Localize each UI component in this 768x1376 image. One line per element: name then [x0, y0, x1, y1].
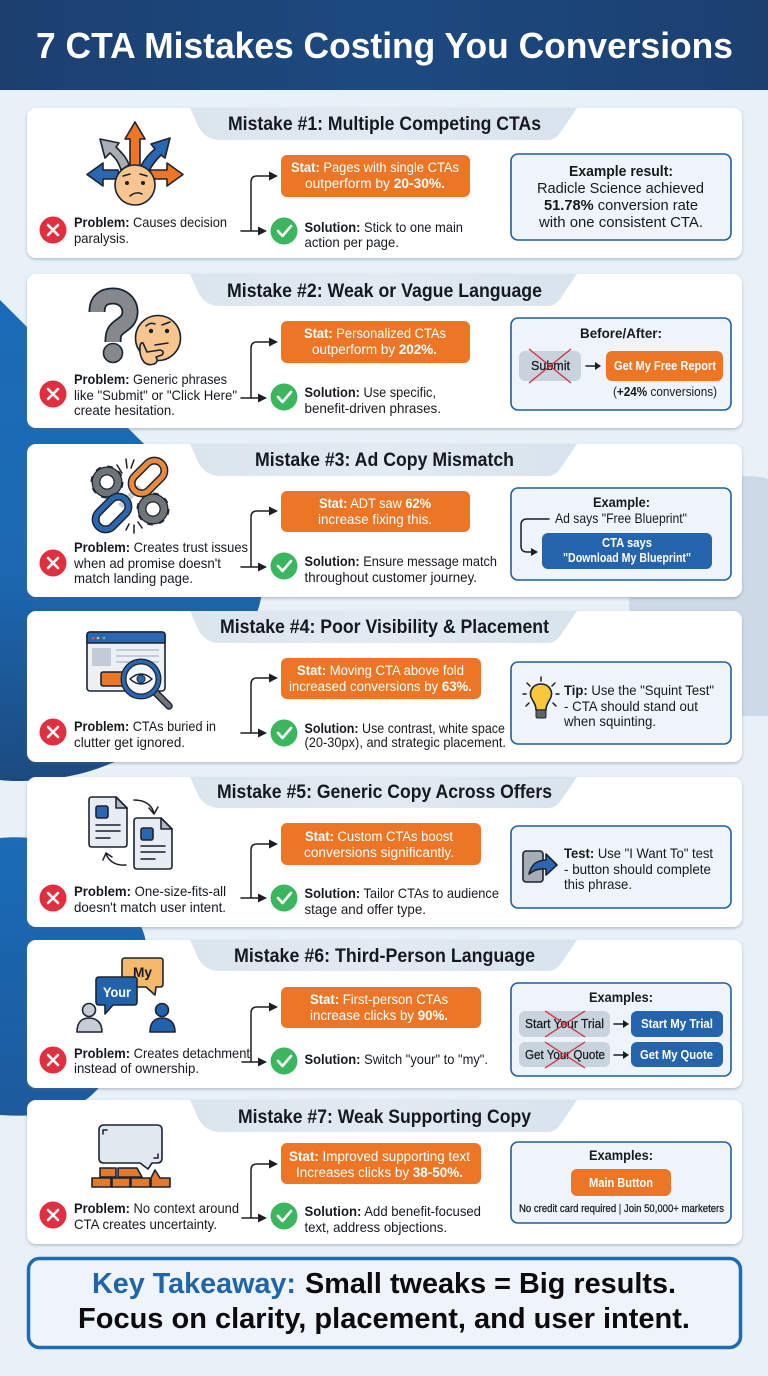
stat [281, 658, 481, 699]
stat: Stat: Personalized CTAs [304, 326, 446, 341]
test box [511, 826, 731, 908]
test box: Test: Use "I Want To" test [564, 845, 713, 861]
problem text: Problem: No context around [74, 1200, 239, 1216]
problem text: Problem: Creates detachment [74, 1045, 250, 1061]
problem text: Problem: Generic phrases [74, 371, 227, 387]
key takeaway [28, 1258, 740, 1348]
icon: swapped documents [89, 797, 172, 869]
stat [281, 155, 470, 197]
blue CTA button: CTA says [602, 536, 652, 550]
solution icon [270, 384, 298, 410]
solution text: (20-30px), and strategic placement. [304, 734, 506, 750]
main button [571, 1169, 671, 1196]
stat: Stat: ADT saw 62% [319, 496, 431, 511]
problem text: CTA creates uncertainty. [74, 1216, 217, 1232]
problem text: Problem: Causes decision [74, 214, 227, 230]
problem text [74, 214, 227, 246]
example box: Example result: [569, 163, 673, 180]
icon: broken chain and gears [91, 456, 169, 534]
before/after box [511, 318, 731, 410]
stat: Stat: Custom CTAs boost [305, 829, 453, 844]
solution text [304, 219, 463, 250]
solution text [304, 384, 441, 416]
stat: increase fixing this. [318, 512, 432, 527]
stat: conversions significantly. [304, 845, 454, 860]
example box: Ad says "Free Blueprint" [555, 510, 687, 526]
stat: Stat: Pages with single CTAs [291, 160, 459, 175]
problem text [74, 1200, 239, 1232]
problem text: paralysis. [74, 230, 129, 246]
example box: with one consistent CTA. [538, 214, 703, 231]
problem icon [40, 884, 66, 912]
problem text [74, 371, 237, 418]
example row 2 [519, 1042, 723, 1068]
arrow: problem to stat and solution [241, 172, 278, 236]
arrow: problem to stat and solution [241, 506, 278, 572]
example row 2: Get My Quote [640, 1048, 713, 1062]
title banner [0, 0, 768, 90]
stat [281, 823, 481, 865]
problem icon [40, 1202, 66, 1228]
stat: Stat: Moving CTA above fold [297, 663, 464, 678]
tip box: - CTA should stand out [564, 698, 698, 714]
solution text: Solution: Switch "your" to "my". [304, 1051, 488, 1067]
solution text: Solution: Add benefit-focused [304, 1203, 481, 1219]
tip box: Tip: Use the "Squint Test" [564, 682, 714, 698]
heading: mistake 4: Mistake #4: Poor Visibility & Placement [220, 617, 550, 638]
blue CTA button [542, 533, 712, 569]
stat: outperform by 20-30%. [305, 176, 445, 191]
panel: mistake 1 [27, 108, 742, 258]
solution text [304, 720, 506, 750]
main button: Main Button [589, 1176, 653, 1190]
problem text: match landing page. [74, 570, 193, 586]
problem text: Problem: One-size-fits-all [74, 883, 226, 899]
problem text: when ad promise doesn't [73, 555, 221, 571]
stat: outperform by 202%. [312, 342, 437, 357]
solution text: Solution: Tailor CTAs to audience [304, 885, 499, 901]
solution icon [270, 1202, 298, 1230]
heading: mistake 5: Mistake #5: Generic Copy Across Offers [217, 782, 552, 803]
title banner: 7 CTA Mistakes Costing You Conversions [36, 25, 733, 66]
stat: Increases clicks by 38-50%. [296, 1165, 463, 1180]
arrow [586, 362, 601, 370]
problem text: doesn't match user intent. [74, 899, 226, 915]
solution text: stage and offer type. [304, 901, 426, 917]
problem text [73, 539, 248, 586]
key takeaway: Key Takeaway: [92, 1268, 296, 1300]
before/after box: (+24% conversions) [613, 385, 717, 399]
tip box: when squinting. [563, 713, 656, 729]
stat: increased conversions by 63%. [289, 679, 472, 694]
problem icon [40, 380, 66, 408]
icon: share arrow on page [523, 851, 557, 882]
solution icon [270, 1048, 298, 1074]
icon: question mark and thinking face [97, 296, 180, 365]
blue CTA button: "Download My Blueprint" [563, 551, 691, 565]
arrow: problem to stat and solution [241, 840, 278, 902]
icon: speech bubbles and people: Your [103, 984, 131, 1000]
stat: Stat: Improved supporting text [289, 1149, 470, 1164]
solution text: throughout customer journey. [304, 569, 477, 585]
example box: Example: [593, 494, 650, 510]
problem icon [40, 1046, 66, 1074]
panel: mistake 5 [27, 777, 742, 927]
panel: mistake 7 [27, 1100, 742, 1244]
arrow: problem to stat and solution [241, 338, 278, 402]
stat [281, 987, 481, 1028]
example box: 51.78% conversion rate [544, 197, 698, 214]
solution icon [270, 720, 298, 746]
examples box [511, 983, 731, 1076]
key takeaway: Small tweaks = Big results. [305, 1268, 676, 1300]
solution text: Solution: Use specific, [304, 384, 436, 400]
problem text: like "Submit" or "Click Here" [74, 387, 237, 403]
arrow: problem to stat and solution [242, 1160, 278, 1222]
example row 1: Start Your Trial [525, 1016, 604, 1031]
solution icon [270, 884, 298, 912]
solution icon [270, 218, 298, 244]
problem text: create hesitation. [74, 402, 175, 418]
examples box: No credit card required | Join 50,000+ marketers [519, 1203, 724, 1215]
heading: mistake 3: Mistake #3: Ad Copy Mismatch [255, 450, 514, 471]
heading: mistake 1: Mistake #1: Multiple Competing CTAs [228, 114, 541, 135]
solution text [304, 1203, 481, 1235]
heading: mistake 6: Mistake #6: Third-Person Language [234, 946, 535, 967]
heading: mistake 2: Mistake #2: Weak or Vague Language [227, 281, 542, 302]
arrow: problem to stat and solution [241, 674, 278, 738]
panel: mistake 6 [27, 940, 742, 1088]
panel: mistake 4 [27, 611, 742, 762]
examples box [511, 1142, 731, 1223]
stat [281, 491, 470, 532]
examples box: Examples: [589, 1147, 653, 1163]
improved button: Get My Free Report [614, 359, 717, 373]
improved button [606, 351, 723, 381]
test box: - button should complete [564, 861, 711, 877]
example row 1: Start My Trial [641, 1017, 713, 1031]
solution text: benefit-driven phrases. [304, 400, 441, 416]
solution text: Solution: Stick to one main [304, 219, 463, 235]
solution text: Solution: Use contrast, white space [304, 720, 505, 736]
solution text: text, address objections. [304, 1219, 447, 1235]
example row 2: Get Your Quote [525, 1047, 605, 1062]
crossed out button [519, 349, 581, 383]
example box [511, 488, 731, 580]
problem text [74, 1045, 250, 1076]
panel: mistake 3 [27, 444, 742, 597]
icon: diverging arrows and confused face [87, 122, 183, 205]
problem text: Problem: CTAs buried in [74, 718, 216, 734]
solution text [304, 885, 499, 917]
crossed out button: Submit [531, 358, 570, 373]
icon: browser window and magnifier [87, 632, 169, 706]
example row 1 [519, 1011, 723, 1037]
panel: mistake 2 [27, 274, 742, 428]
stat [281, 1143, 481, 1184]
problem text: Problem: Creates trust issues [74, 539, 248, 555]
problem icon [40, 216, 66, 244]
problem text: instead of ownership. [74, 1060, 199, 1076]
problem icon [40, 550, 66, 576]
tip box [511, 662, 731, 744]
icon: light bulb [523, 677, 559, 718]
stat: Stat: First-person CTAs [310, 992, 448, 1007]
solution text: Solution: Ensure message match [304, 553, 497, 569]
solution text [304, 553, 497, 585]
key takeaway: Focus on clarity, placement, and user intent. [78, 1303, 690, 1335]
icon: speech bubbles and people: My [133, 964, 152, 980]
icon: empty speech bubble on broken bricks [92, 1125, 170, 1187]
problem text [74, 883, 226, 915]
before/after box: Before/After: [580, 325, 662, 341]
heading: mistake 7: Mistake #7: Weak Supporting Copy [238, 1107, 531, 1128]
solution icon [270, 552, 298, 580]
arrow: problem to stat and solution [242, 1002, 278, 1066]
stat: increase clicks by 90%. [310, 1008, 448, 1023]
test box: this phrase. [564, 876, 632, 892]
problem icon [40, 718, 66, 746]
examples box: Examples: [589, 989, 653, 1005]
problem text: clutter get ignored. [74, 734, 185, 750]
example box: Radicle Science achieved [537, 180, 704, 197]
solution text: action per page. [304, 234, 399, 250]
icon: speech bubbles and people [77, 958, 175, 1032]
problem text [74, 718, 216, 750]
arrow [521, 519, 549, 556]
example box [511, 154, 731, 240]
stat [281, 321, 470, 363]
